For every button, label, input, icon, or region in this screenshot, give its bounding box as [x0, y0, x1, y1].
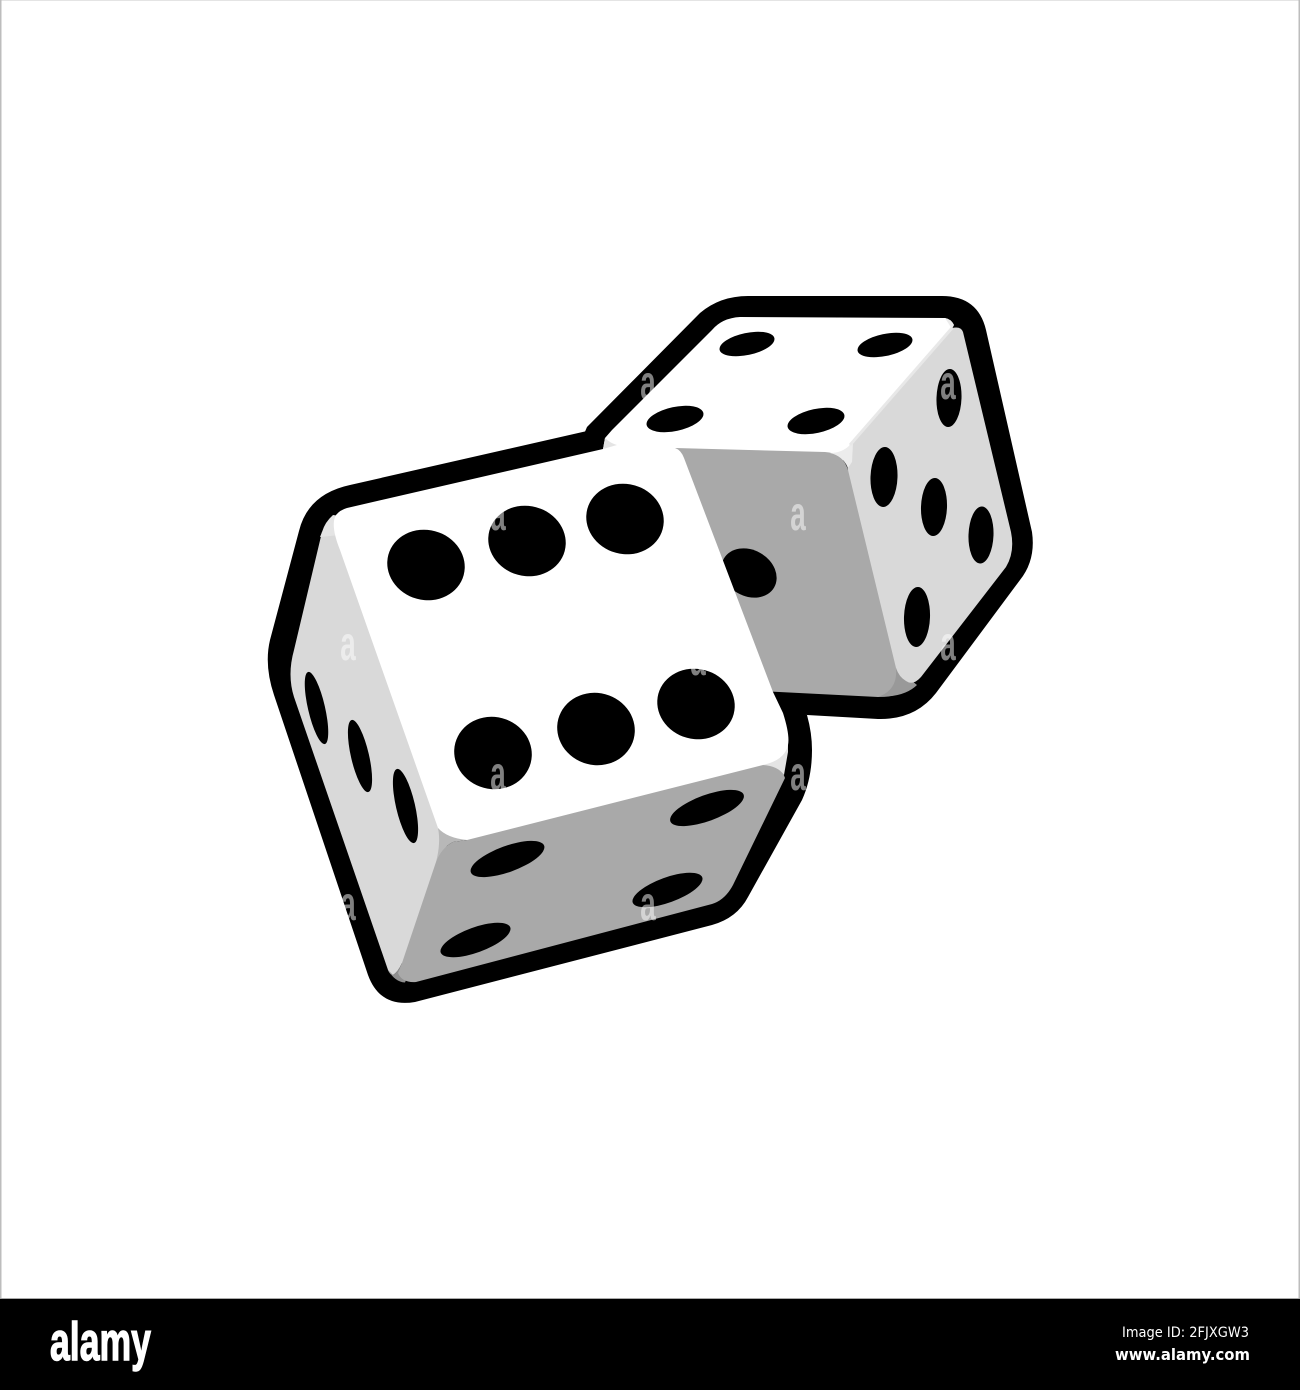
front die — [268, 431, 812, 1003]
back die shaded face — [675, 448, 917, 697]
watermark marks: a — [940, 617, 957, 671]
watermark marks: a — [790, 487, 807, 541]
watermark marks: a — [490, 487, 507, 541]
front die left face — [290, 515, 460, 975]
watermark marks — [340, 356, 957, 931]
watermark marks: a — [940, 356, 957, 410]
watermark marks: a — [490, 747, 507, 801]
footer bar — [0, 1298, 1300, 1390]
watermark marks: a — [690, 632, 707, 686]
watermark marks: a — [790, 747, 807, 801]
back die top face — [603, 317, 954, 470]
watermark marks: a — [340, 617, 357, 671]
website: www.alamy.com — [1115, 1345, 1250, 1364]
logo: alamy: alamy — [50, 1312, 151, 1372]
back die outline — [584, 296, 1033, 719]
image id: Image ID: 2FJXGW3 — [1122, 1325, 1249, 1341]
back die — [584, 296, 1033, 719]
watermark marks: a — [640, 877, 657, 931]
front die outline — [268, 431, 812, 1003]
front die top face — [334, 448, 788, 840]
watermark marks: a — [640, 356, 657, 410]
front die shaded face — [388, 740, 788, 982]
watermark marks: a — [340, 877, 357, 931]
back die right face — [830, 318, 1012, 683]
